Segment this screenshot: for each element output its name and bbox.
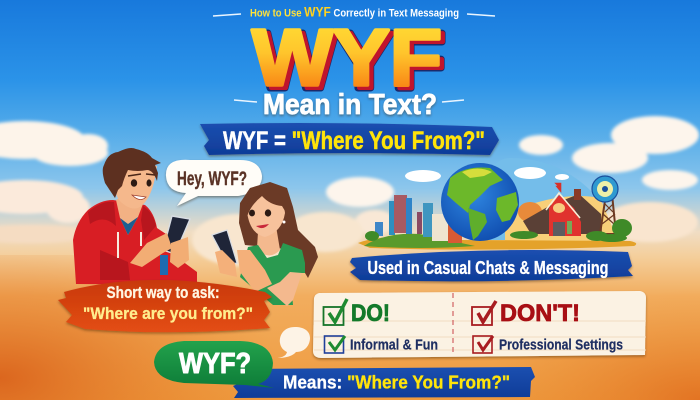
boy hood shading	[88, 202, 156, 280]
globe	[441, 163, 519, 241]
banner: short way to ask: Short way to ask:	[106, 284, 220, 302]
farm barn	[523, 183, 602, 236]
banner: used in casual chats: Used in Casual Chats & Messaging	[368, 258, 608, 278]
banner: means: Means: "Where You From?"	[283, 372, 510, 392]
windmill	[592, 176, 618, 234]
girl shirt	[240, 243, 305, 305]
speech bubble: small blank	[277, 327, 310, 358]
girl hair back	[239, 182, 318, 278]
girl fringe	[244, 190, 288, 225]
speech bubble: WYF?	[154, 341, 274, 388]
girl face	[247, 195, 285, 237]
boy face	[128, 174, 155, 200]
do heading: DO!	[351, 300, 390, 327]
illustration: girl with phone	[212, 182, 318, 306]
girl phone	[212, 230, 237, 265]
green hill	[364, 234, 475, 248]
do item: Informal & Fun	[350, 338, 438, 354]
title: WYF: WYF	[255, 16, 445, 105]
boy neck	[116, 195, 143, 235]
girl neck	[257, 226, 280, 256]
sky dome	[470, 158, 610, 240]
speech bubble: WYF?: WYF?	[179, 348, 251, 380]
boy drawstrings	[118, 232, 141, 258]
boy shirt	[120, 217, 138, 235]
boy head	[115, 160, 157, 208]
boy hair	[103, 148, 161, 198]
panel: do and don't	[313, 291, 646, 358]
city buildings	[375, 195, 462, 243]
do heading	[324, 299, 390, 327]
boy ear	[108, 178, 118, 192]
girl eyes and mouth	[249, 209, 286, 228]
do item	[324, 336, 438, 354]
farm tree	[518, 202, 542, 222]
boy hoodie	[73, 200, 197, 285]
title: Mean in Text?: Mean in Text?	[263, 89, 437, 121]
bushes	[365, 219, 632, 242]
girl hands	[215, 250, 272, 292]
title: WYF: WYF	[252, 13, 442, 102]
clouds: left	[0, 121, 108, 243]
ground	[358, 237, 636, 250]
banner: short way to ask: "Where are you from?"	[83, 304, 253, 323]
banner: used in casual chats	[350, 250, 633, 281]
don't heading: DON'T!	[500, 300, 580, 327]
boy hands	[130, 233, 189, 268]
banner: short way to ask	[58, 280, 272, 332]
illustration: boy with phone	[73, 148, 197, 285]
girl arm	[267, 272, 302, 306]
banner: WYF = "Where You From?": WYF = "Where You From?"	[223, 127, 485, 155]
don't item	[473, 336, 623, 354]
speech bubble: Hey, WYF?	[166, 160, 262, 206]
title: WYF: WYF	[256, 16, 446, 105]
boy strap	[160, 255, 168, 275]
speech bubble: Hey, WYF?: Hey, WYF?	[177, 169, 247, 190]
boy phone	[163, 216, 190, 254]
banner: means	[233, 367, 535, 398]
subtitle: How to Use WYF Correctly in Text Messaging	[250, 4, 459, 20]
clouds: right and centre	[192, 116, 699, 266]
illustration: city, globe and farm	[358, 158, 636, 250]
don't item: Professional Settings	[499, 338, 623, 354]
